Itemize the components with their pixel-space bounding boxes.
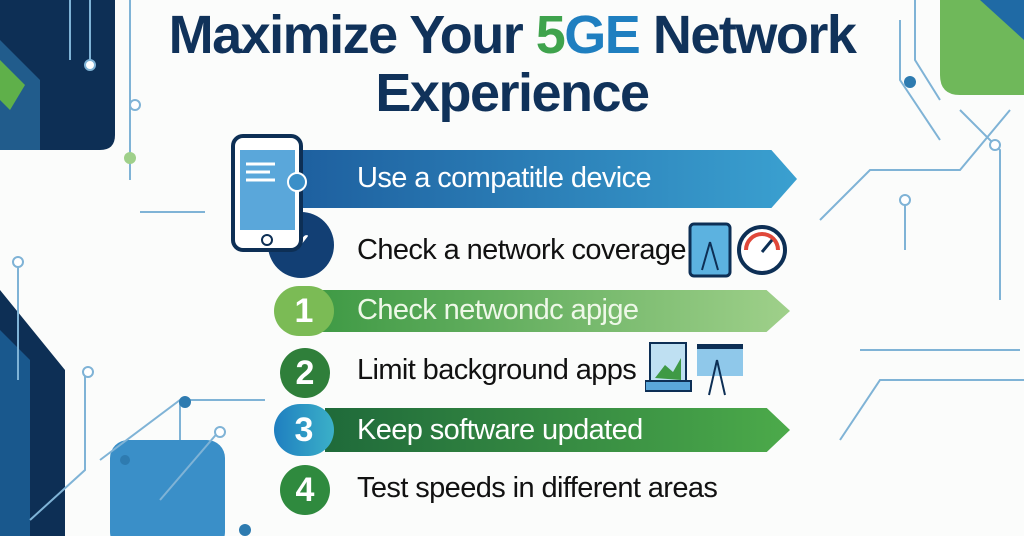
number 3: [274, 404, 334, 456]
text: Keep software updated: [357, 414, 643, 446]
number 4: 4: [296, 471, 314, 509]
text: Limit background apps: [357, 354, 636, 386]
bar 3: [320, 290, 790, 332]
icon: phone: [231, 134, 307, 252]
icon: laptop and tower: [645, 342, 743, 396]
bar 1: compatible device: [285, 150, 797, 208]
icon: navy check circle: [268, 212, 334, 278]
number 1: [274, 286, 334, 336]
number 1: 1: [295, 292, 313, 330]
number 2: [280, 348, 330, 398]
title: Experience: [375, 63, 649, 123]
text: Test speeds in different areas: [357, 472, 717, 504]
number 4: [280, 465, 330, 515]
title: Maximize Your 5GE Network: [169, 5, 855, 65]
number 2: 2: [296, 354, 314, 392]
title: [169, 5, 857, 123]
text: use a compatible device: Use a compatitle device: [357, 162, 651, 194]
icon: tower tablet: [688, 222, 787, 278]
text: Check netwondc apjge: [357, 294, 638, 326]
text: check coverage: Check a network coverage: [357, 234, 686, 266]
icon: navy check circle: ✓: [290, 228, 312, 258]
number 3: 3: [295, 411, 313, 449]
bar 5: [325, 408, 790, 452]
